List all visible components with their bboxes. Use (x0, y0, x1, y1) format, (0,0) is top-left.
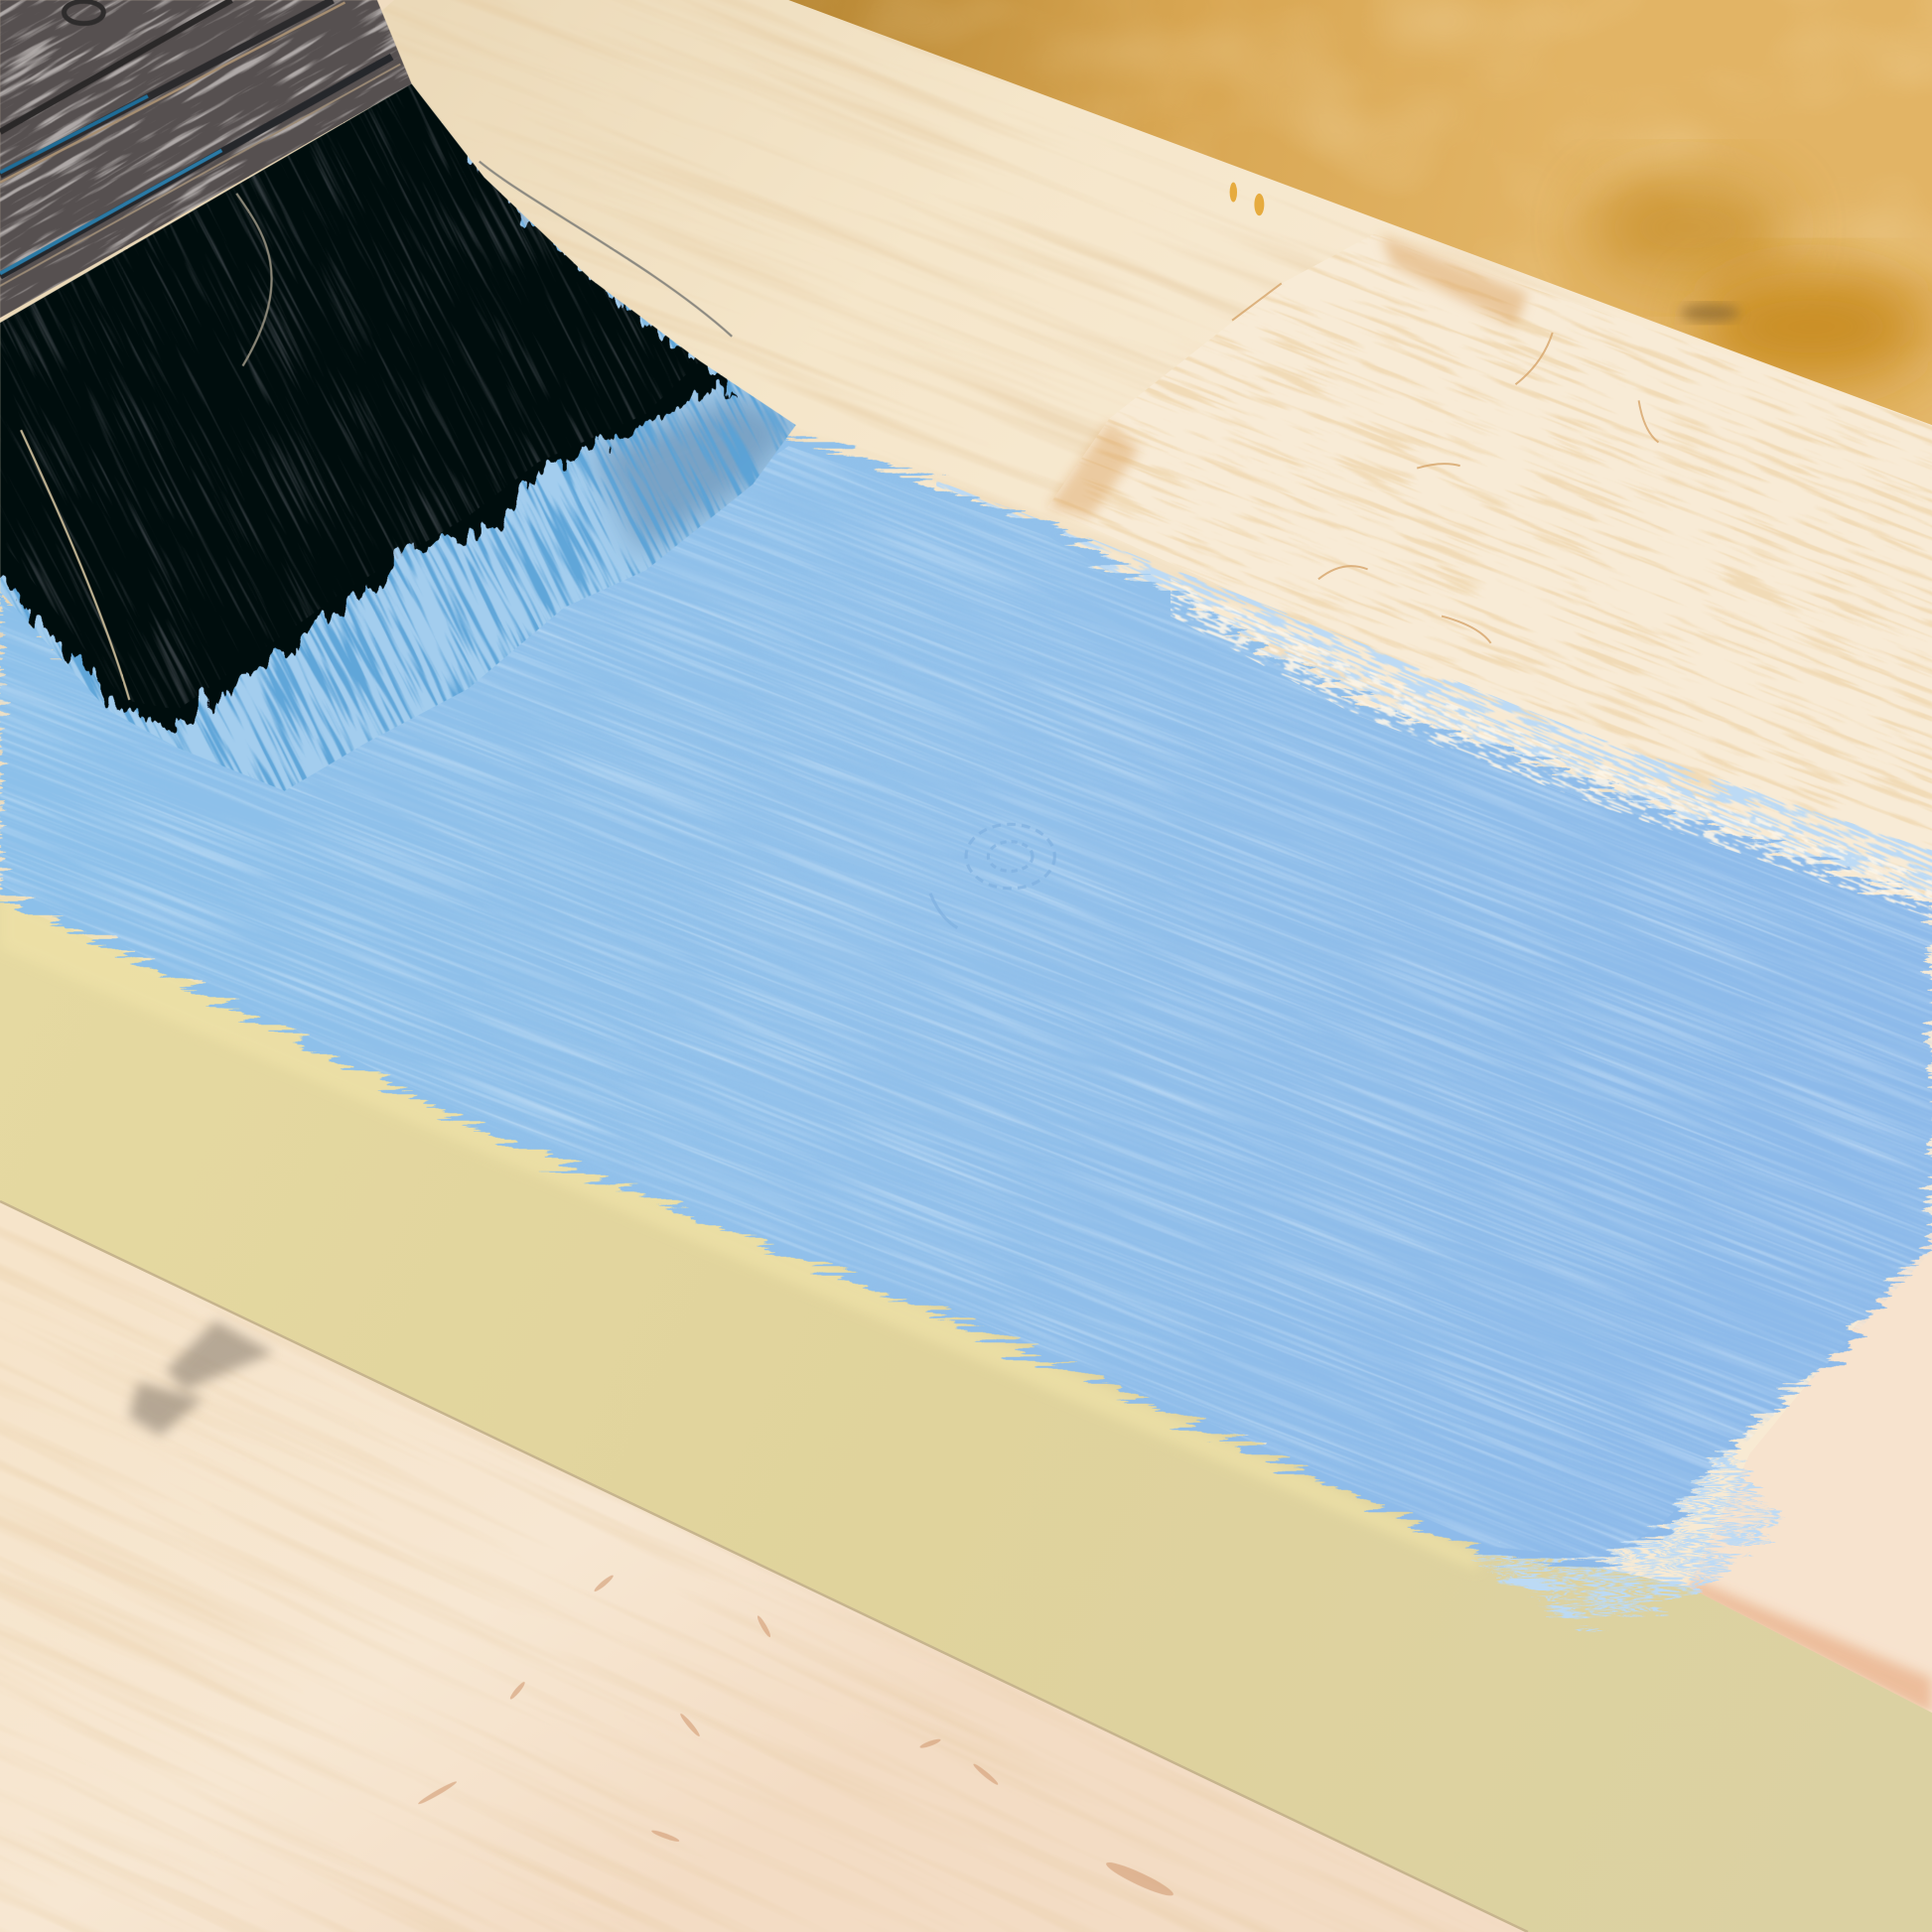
right plank end below paint (1688, 1232, 1932, 1716)
brush-line texture (0, 446, 1932, 1559)
brush bristles with paint (0, 62, 801, 791)
dry brush fringe, top edge (936, 481, 1932, 899)
orange paint drops (1230, 183, 1264, 215)
lower wooden plank (0, 1201, 1528, 1932)
metal ferrule (0, 0, 412, 318)
stray hairs (21, 162, 732, 700)
ferrule grooves (0, 0, 400, 286)
frayed unpainted flecks along top edge (1171, 579, 1932, 918)
paintbrush (0, 0, 801, 791)
brush-line highlights (0, 446, 1932, 1559)
wood chips and scratches (417, 1574, 1175, 1900)
smudge on lower plank (129, 1320, 274, 1436)
sanded stained patch on plank (1047, 183, 1932, 905)
solid paint body (0, 434, 1932, 1565)
blue paint stroke (0, 434, 1932, 1626)
masking tape band (0, 894, 1932, 1932)
plywood background, top right (740, 0, 1932, 492)
knot in paint (930, 824, 1054, 928)
dry brush fringe, lower right (1472, 1442, 1780, 1626)
